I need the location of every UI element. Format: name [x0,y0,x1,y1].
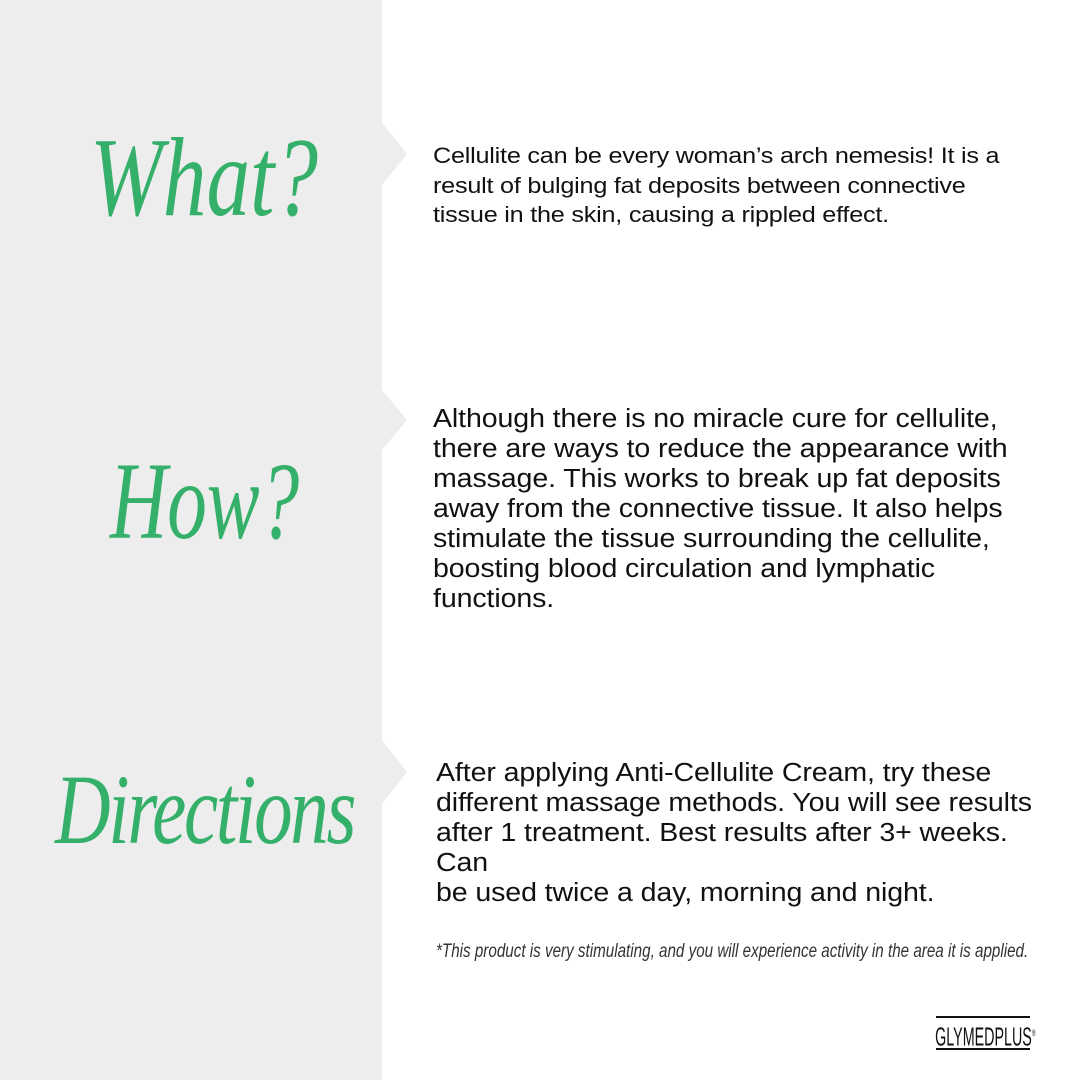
text: how: there are ways to reduce the appearance with [433,435,1008,463]
text: directions: different massage methods. You will see results [436,789,1032,817]
left panel with notches [0,0,407,1080]
text: directions: after 1 treatment. Best results after 3+ weeks. [436,819,1008,847]
text: how: Although there is no miracle cure for cellulite, [433,405,998,433]
text: what: Cellulite can be every woman’s arch nemesis! It is a [433,143,999,168]
heading: What?: What? [90,116,318,240]
text: directions: be used twice a day, morning and night. [436,879,934,907]
text: directions: After applying Anti-Cellulite Cream, try these [436,759,991,787]
heading: Directions: Directions [55,754,354,865]
text: how [433,405,1008,613]
logo: GLYMEDPLUS® [935,1022,1035,1052]
text: what: result of bulging fat deposits between connective [433,172,966,198]
text: how: stimulate the tissue surrounding the cellulite, [433,525,990,553]
text: how: functions. [433,585,554,613]
text: what [433,143,1000,227]
text: directions: Can [436,849,488,877]
text: directions [436,759,1032,907]
text: how: away from the connective tissue. It also helps [433,495,1003,523]
heading: How?: How? [110,440,299,562]
text: how: boosting blood circulation and lymphatic [433,555,935,583]
footnote: *This product is very stimulating, and you will experience activity in the area it is applied. [436,941,1028,962]
text: what: tissue in the skin, causing a rippled effect. [433,202,889,227]
text: how: massage. This works to break up fat deposits [433,465,1001,493]
